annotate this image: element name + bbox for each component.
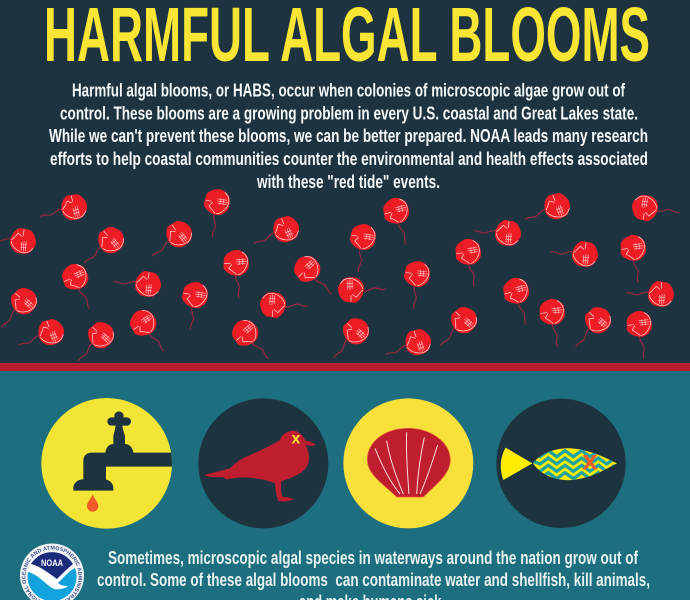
icon: dead seabird: [198, 398, 328, 528]
icon: scallop shell: [343, 398, 473, 528]
bottom description text: [97, 548, 650, 600]
icon: contaminated fish: [496, 399, 626, 528]
top dark background panel: [0, 0, 690, 364]
icon: contaminated fish: x: [582, 444, 598, 475]
icon: faucet with drop: [41, 398, 173, 529]
algae cells illustration: [0, 187, 682, 369]
NOAA logo: NOAA: [41, 558, 63, 569]
red divider band: [0, 363, 690, 371]
icon: dead seabird: x: [292, 430, 301, 447]
intro text block: [49, 80, 648, 192]
bottom teal background panel: [0, 371, 690, 600]
intro text block: with these "red tide" events.: [256, 172, 440, 192]
